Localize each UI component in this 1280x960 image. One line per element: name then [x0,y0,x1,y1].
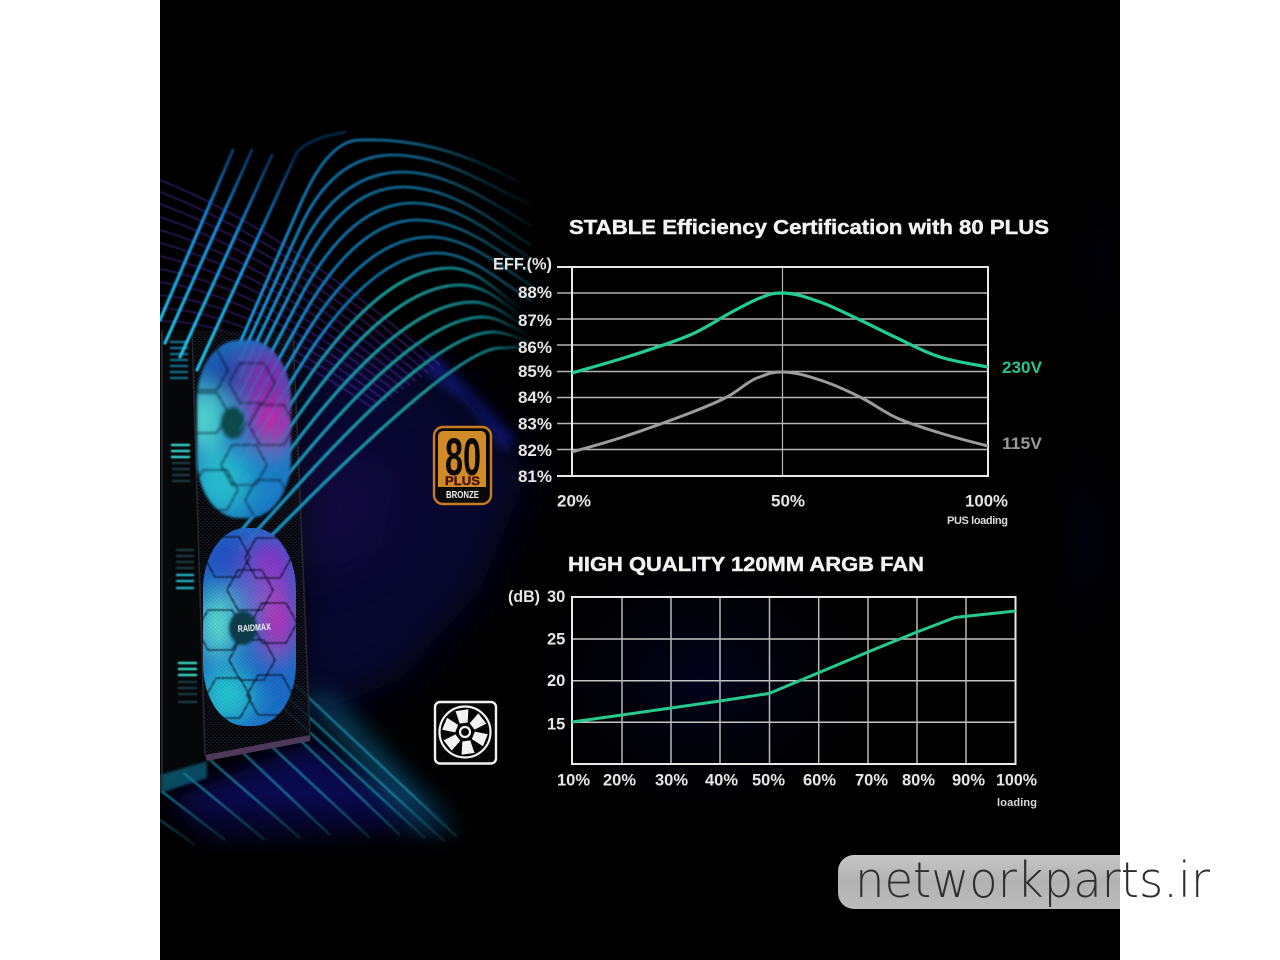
blue and teal wave lines [160,132,530,549]
efficiency axis labels: 20% [557,492,591,510]
RAIDMAX logo: RAIDMAX [237,622,272,635]
efficiency axis labels: 88% [518,283,552,302]
loading label: loading [997,797,1037,809]
noise axis labels: 60% [803,772,836,790]
icon: fan [435,702,496,764]
efficiency axis labels: 84% [518,388,552,407]
watermark: networkparts.ir [855,852,1211,909]
efficiency grid [557,267,988,476]
noise axis labels: (dB) [508,588,540,606]
floor rays [160,682,461,850]
noise axis labels: 70% [855,772,888,790]
efficiency frame [557,267,988,476]
efficiency axis labels: 83% [518,414,552,434]
icon: 80 PLUS Bronze badge: 80 [445,428,481,487]
lower RGB fan [203,528,296,726]
noise axis labels: 10% [557,772,590,790]
230V label: 230V [1002,358,1043,377]
icon: 80 PLUS Bronze badge: PLUS [445,474,480,488]
noise axis labels: 15 [547,716,565,734]
icon: 80 PLUS Bronze badge: BRONZE [446,490,479,501]
background artwork: light waves and PC case [160,132,1130,890]
side vents [170,342,197,702]
noise axis labels: 30% [655,772,688,790]
PUS loading label: PUS loading [947,515,1008,527]
navy haze behind charts [297,180,1130,810]
noise axis labels: 25 [547,630,565,648]
chart: efficiency curves [493,254,1043,527]
230V curve [572,293,988,373]
efficiency axis labels: 81% [518,467,552,486]
noise axis labels [508,588,1037,790]
efficiency axis labels: 87% [518,311,552,330]
noise axis labels: 100% [996,772,1037,790]
icon: 80 PLUS Bronze badge [434,427,491,504]
efficiency axis labels: 100% [965,492,1008,510]
noise axis labels: 20 [547,672,565,690]
efficiency axis labels: 50% [771,492,805,510]
PC case body [160,330,310,793]
115V label: 115V [1002,434,1043,453]
noise grid [572,597,1016,764]
efficiency axis labels: 82% [518,441,552,460]
noise curve [572,611,1016,722]
title: efficiency: STABLE Efficiency Certification with 80 PLUS [569,217,1049,239]
chart: fan noise [508,588,1037,809]
upper RGB fan [195,338,293,520]
faint wave reflections over the upper fan [160,162,365,550]
115V curve [572,372,988,452]
title: fan: HIGH QUALITY 120MM ARGB FAN [568,554,924,576]
noise axis labels: 90% [952,772,985,790]
noise axis labels: 50% [752,772,785,790]
noise axis labels: 20% [603,772,636,790]
efficiency axis labels [493,254,1008,510]
noise axis labels: 80% [902,772,935,790]
black background panel [160,0,1120,960]
noise axis labels: 30 [547,588,565,606]
noise frame [572,597,1016,764]
efficiency axis labels: 85% [518,362,552,381]
efficiency axis labels: 86% [518,338,552,357]
noise axis labels: 40% [705,772,738,790]
efficiency axis labels: EFF.(%) [493,254,552,274]
purple arc lines [160,180,440,409]
